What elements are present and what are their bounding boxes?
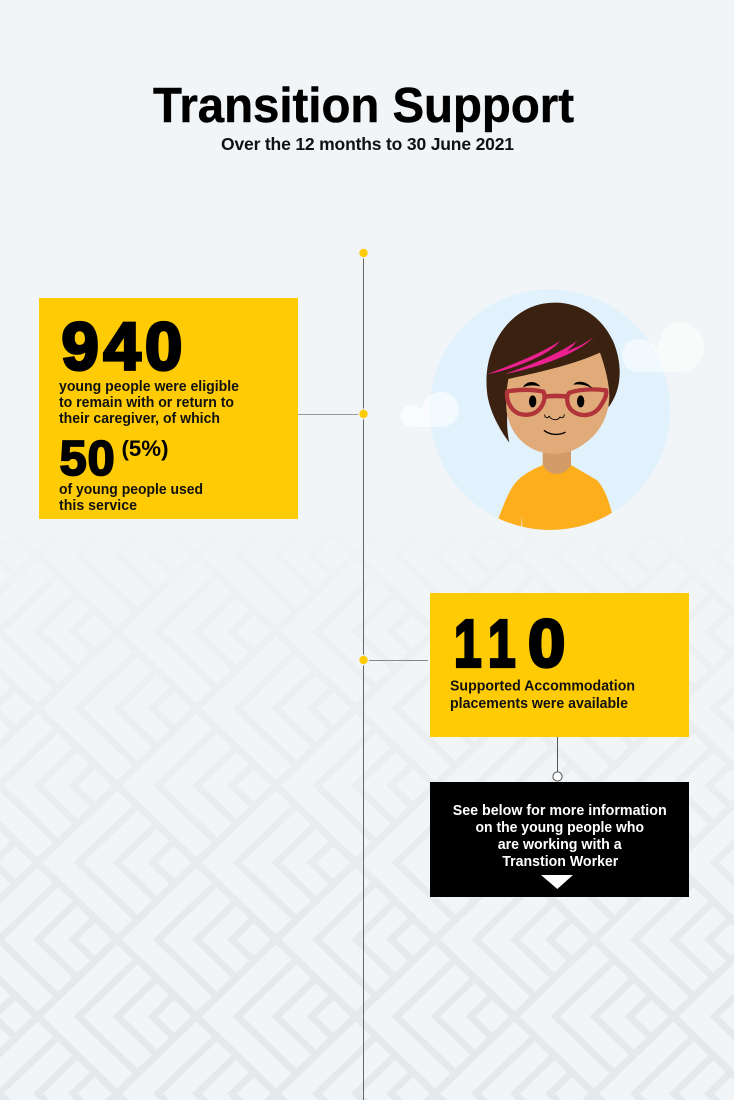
connector bbox=[553, 737, 562, 781]
panel: supported accommodation bbox=[430, 593, 689, 737]
panel: eligible young people: (5%) bbox=[122, 436, 168, 461]
callout: see below: Transtion Worker bbox=[502, 854, 619, 870]
panel: supported accommodation: 0 bbox=[528, 606, 565, 682]
illustration: left cloud bbox=[401, 392, 459, 427]
illustration: right cloud bbox=[622, 322, 704, 372]
panel: eligible young people: their caregiver, of which bbox=[59, 410, 220, 427]
timeline bbox=[298, 248, 428, 1100]
panel: eligible young people: of young people used bbox=[59, 481, 203, 498]
panel: supported accommodation: 1 bbox=[454, 607, 482, 681]
icon: down arrow bbox=[541, 875, 573, 889]
panel: supported accommodation: placements were available bbox=[450, 695, 628, 712]
callout: see below: are working with a bbox=[498, 837, 623, 853]
callout: see below: See below for more information bbox=[453, 803, 667, 819]
title: Transition Support bbox=[153, 78, 574, 133]
panel: supported accommodation: 1 bbox=[488, 607, 516, 681]
panel: eligible young people: 50 bbox=[60, 432, 115, 486]
panel: eligible young people: young people were eligible bbox=[59, 378, 239, 395]
panel: eligible young people: 940 bbox=[62, 310, 182, 384]
subtitle: Over the 12 months to 30 June 2021 bbox=[221, 134, 514, 154]
panel: eligible young people: to remain with or return to bbox=[59, 394, 234, 411]
panel: eligible young people bbox=[39, 298, 298, 519]
callout: see below bbox=[430, 782, 689, 897]
panel: supported accommodation: Supported Accommodation bbox=[450, 678, 635, 694]
callout: see below: on the young people who bbox=[476, 820, 644, 836]
illustration: young person avatar bbox=[430, 289, 670, 540]
panel: eligible young people: this service bbox=[59, 497, 137, 514]
